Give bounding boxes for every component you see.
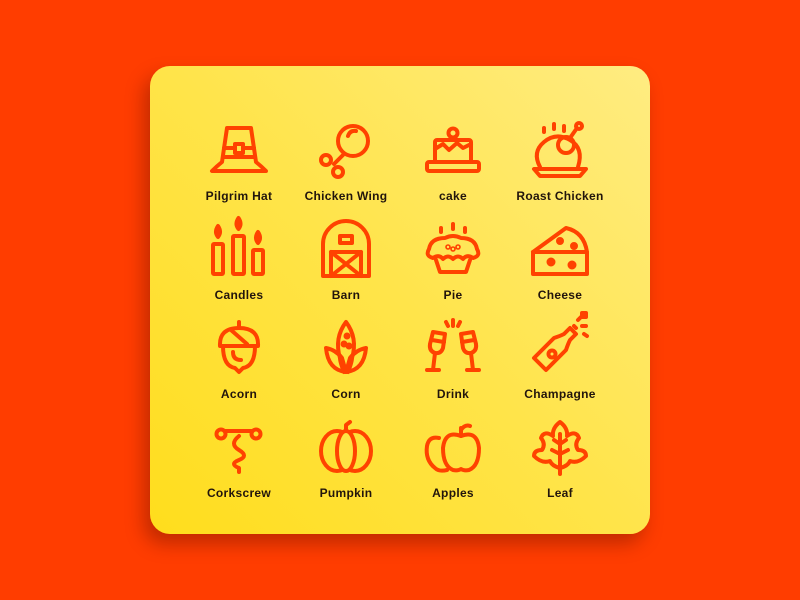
icon: corn (326, 322, 366, 372)
label: Roast Chicken: Roast Chicken (516, 189, 604, 203)
label: Cheese: Cheese (538, 288, 582, 302)
icon: leaf (534, 422, 586, 474)
label: Apples: Apples (432, 486, 474, 500)
label: Leaf: Leaf (547, 486, 573, 500)
icon: barn (323, 221, 369, 276)
icon: chicken wing (321, 126, 368, 177)
label: Pie: Pie (444, 288, 462, 302)
icon: cake (427, 128, 479, 171)
icon: pilgrim hat (212, 128, 266, 171)
icon: corkscrew (216, 430, 260, 472)
label: Pumpkin: Pumpkin (320, 486, 372, 500)
icon: drink (427, 320, 479, 370)
label: Acorn: Acorn (221, 387, 257, 401)
label: Candles: Candles (215, 288, 263, 302)
icon: roast chicken (534, 123, 586, 176)
label: Barn: Barn (332, 288, 360, 302)
card panel (150, 66, 650, 534)
label: Chicken Wing: Chicken Wing (305, 189, 387, 203)
icon: acorn (220, 322, 258, 372)
icon: champagne (534, 313, 587, 370)
label: Corn: Corn (331, 387, 361, 401)
label: cake: cake (439, 189, 467, 203)
label: Corkscrew: Corkscrew (207, 486, 271, 500)
label: Champagne: Champagne (524, 387, 596, 401)
icon: apples (427, 426, 479, 471)
label: Drink: Drink (437, 387, 469, 401)
icon: pie (428, 224, 478, 272)
icon: cheese (533, 228, 587, 274)
label: Pilgrim Hat: Pilgrim Hat (206, 189, 272, 203)
icon: candles (213, 218, 263, 274)
icon: pumpkin (321, 422, 371, 471)
